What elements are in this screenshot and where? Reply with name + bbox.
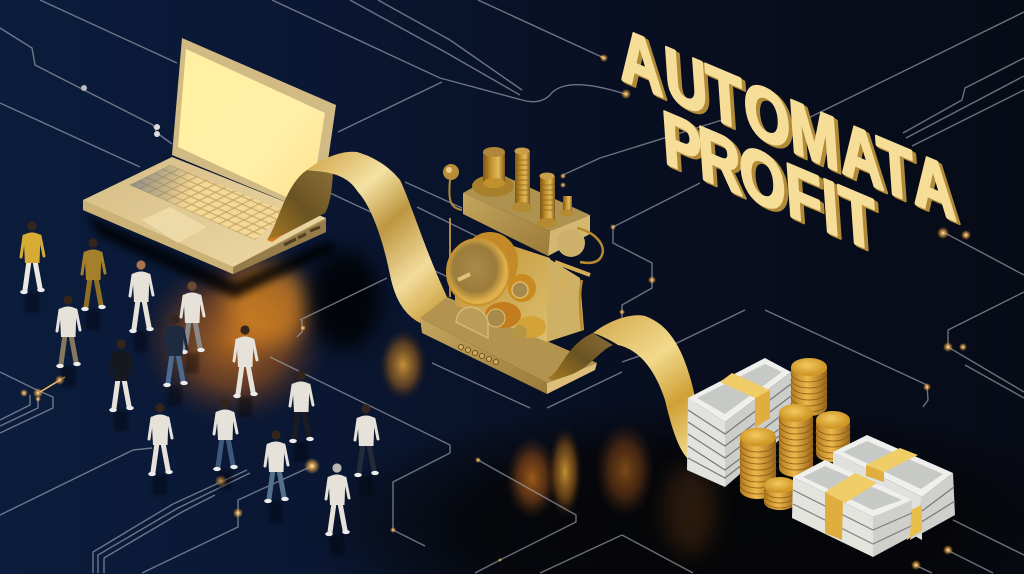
person 14 [325, 463, 350, 555]
right pipe and valve [555, 228, 603, 330]
flywheel [447, 232, 518, 305]
laptop screen lid [172, 38, 336, 216]
coins: small front [764, 477, 796, 510]
floor glow: amber under laptop [140, 255, 330, 425]
person 6 [109, 339, 134, 431]
paper band [866, 448, 918, 472]
person 4 [180, 281, 205, 373]
lever with ball [443, 164, 462, 297]
title line 1: AUTOMATA [616, 10, 958, 237]
person 11 [289, 370, 314, 462]
coins: front left [740, 428, 776, 499]
person 13 [354, 404, 379, 496]
person 7 [163, 314, 188, 406]
person 2 [81, 238, 106, 330]
title line 2: PROFIT [659, 93, 879, 269]
person 3 [129, 260, 154, 352]
threaded bolts [512, 148, 574, 228]
laptop [83, 38, 336, 274]
laptop base [83, 200, 326, 274]
gold ribbon from laptop to machine [267, 152, 447, 323]
cash stack back right [833, 435, 955, 540]
person 10 [213, 398, 238, 490]
people walking [20, 221, 379, 555]
floor reflections [85, 215, 716, 555]
machine base plate [420, 297, 597, 394]
coins: tall back [791, 358, 827, 416]
paper band [720, 373, 770, 398]
person 12 [264, 430, 289, 522]
coins: right [816, 411, 850, 462]
cylinder and disc [472, 147, 514, 197]
keyboard [130, 165, 287, 240]
person 8 [233, 325, 258, 417]
coin stacks [740, 358, 850, 510]
gold ribbon to money [548, 315, 696, 462]
person 5 [56, 295, 81, 387]
touchpad [142, 207, 207, 243]
machine body [455, 235, 550, 342]
paper band [825, 473, 877, 503]
rollers [485, 274, 546, 339]
person 1 [20, 221, 45, 313]
coins: center [779, 404, 813, 477]
cash stack left [687, 358, 791, 487]
cash stack front right [792, 460, 912, 557]
arch plate [456, 307, 488, 338]
rivets [458, 344, 498, 364]
title: Automata Profit [616, 10, 958, 269]
person 9 [148, 403, 173, 495]
top block [463, 173, 590, 256]
machine [420, 147, 603, 394]
